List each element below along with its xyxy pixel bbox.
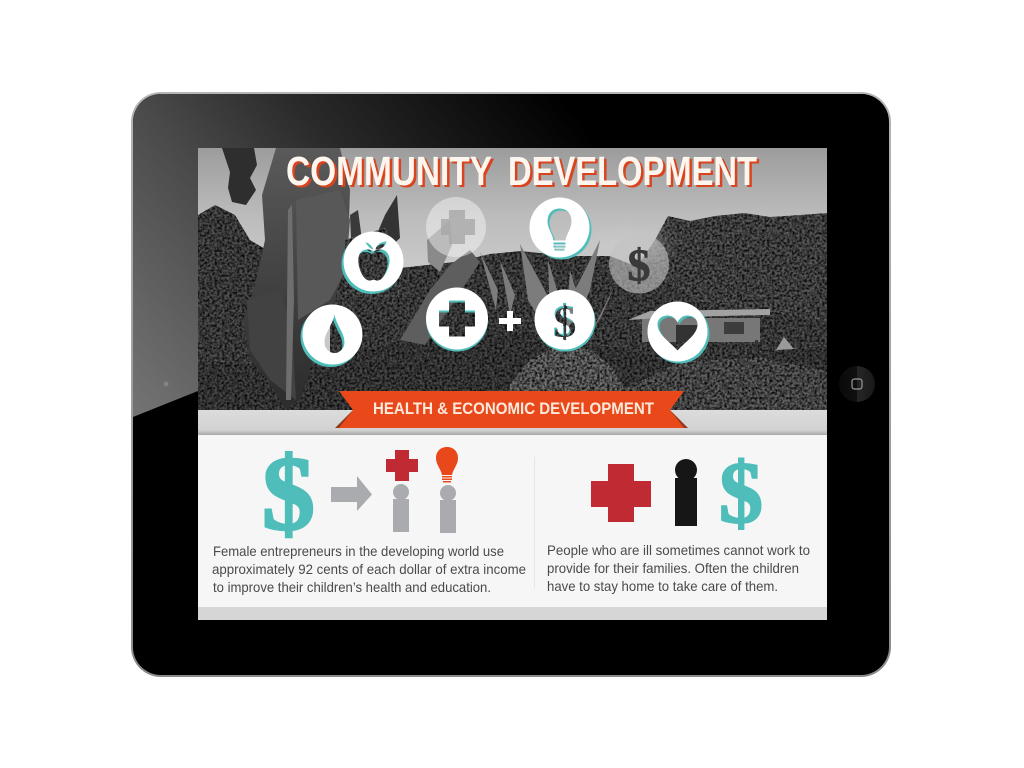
photo: landscape with banana plants and house [198, 148, 827, 410]
tablet body [131, 92, 945, 677]
foliage behind apple [345, 228, 402, 300]
home button [839, 366, 875, 402]
left trees [198, 205, 314, 362]
icon: light bulb [530, 198, 592, 260]
icon: faded dollar [609, 234, 669, 294]
foreground foliage [198, 330, 827, 410]
arrow [331, 476, 372, 511]
camera dot [164, 382, 168, 386]
right caption: People who are ill sometimes cannot work to [547, 542, 810, 558]
left diagram: income to health and education [262, 435, 458, 552]
person two [440, 485, 456, 533]
icon: teal dollar: $ [719, 445, 763, 542]
ribbon banner: HEALTH & ECONOMIC DEVELOPMENT [373, 399, 655, 418]
icon: faded cross [426, 197, 486, 257]
house [628, 309, 770, 352]
title: COMMUNITY [286, 148, 492, 194]
icon: water drop [300, 304, 362, 367]
left caption: approximately 92 cents of each dollar of extra income [212, 561, 526, 577]
mountain [640, 213, 827, 320]
right caption: provide for their families. Often the children [547, 560, 799, 576]
lower band [198, 410, 827, 435]
left caption: to improve their children’s health and education. [213, 579, 491, 595]
title [286, 148, 760, 196]
right caption [547, 542, 810, 594]
lower panel [198, 435, 827, 620]
fan plant [480, 240, 615, 335]
screen glare [133, 92, 945, 417]
icon: red cross [386, 450, 418, 481]
middle plant leaves [400, 250, 480, 345]
icon: large dollar: $ [262, 435, 315, 552]
ribbon banner [335, 391, 688, 428]
banana leaves left [222, 148, 257, 205]
plus sign [499, 311, 521, 331]
right diagram: illness and income [591, 445, 763, 542]
icon: faded dollar: $ [628, 240, 650, 290]
middle tree line [330, 251, 826, 353]
title: DEVELOPMENT [510, 150, 760, 196]
left caption [212, 543, 526, 595]
icon: orange bulb [436, 447, 458, 482]
title: COMMUNITY [288, 150, 494, 196]
person black [675, 459, 697, 526]
icon: dollar [534, 290, 596, 352]
icon: health cross [426, 288, 488, 352]
person one [393, 484, 409, 532]
icon: heart [648, 302, 710, 364]
screen [198, 148, 827, 620]
icon: large red cross [591, 464, 651, 522]
left caption: Female entrepreneurs in the developing world use [213, 543, 504, 559]
icon: apple [342, 232, 404, 294]
right caption: have to stay home to take care of them. [547, 578, 778, 594]
title: DEVELOPMENT [508, 148, 757, 194]
